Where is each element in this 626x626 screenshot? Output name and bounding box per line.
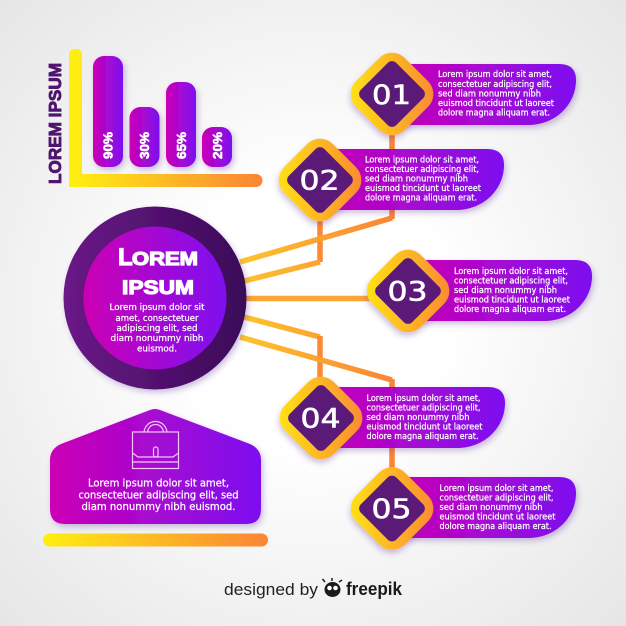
text 01: dolore magna aliquam erat.	[438, 108, 550, 118]
text 04: Lorem ipsum dolor sit amet,	[366, 394, 480, 404]
text 03: dolore magna aliquam erat.	[454, 305, 566, 315]
text 01: consectetuer adipiscing elit,	[438, 80, 552, 90]
text 05: sed diam nonummy nibh	[440, 503, 542, 513]
text 03	[454, 267, 571, 315]
bar 90%: 90%	[100, 132, 116, 159]
number 01: 01	[372, 80, 411, 111]
circle heading	[118, 244, 198, 299]
house text	[78, 478, 238, 513]
text 02: dolore magna aliquam erat.	[365, 194, 477, 204]
bar 30%	[130, 107, 160, 167]
banner 02	[319, 149, 504, 210]
house panel	[50, 409, 261, 524]
number 04: 04	[300, 404, 340, 434]
house text: Lorem ipsum dolor sit amet,	[88, 478, 229, 490]
text 05: consectetuer adipiscing elit,	[440, 494, 554, 504]
bar 90%	[93, 56, 123, 167]
text 04: dolore magna aliquam erat.	[366, 432, 478, 442]
banner 05	[391, 477, 576, 538]
text 04: sed diam nonummy nibh	[366, 413, 470, 423]
text 02: Lorem ipsum dolor sit amet,	[365, 156, 479, 166]
text 05: dolore magna aliquam erat.	[440, 522, 552, 532]
diamond 01	[343, 45, 441, 143]
text 03: sed diam nonummy nibh	[454, 286, 557, 296]
connector lines	[240, 130, 392, 475]
text 05: euismod tincidunt ut laoreet	[440, 512, 556, 522]
freepik: freepik	[346, 579, 403, 599]
circle body text: Lorem ipsum dolor sit	[110, 303, 205, 313]
text 02	[365, 156, 482, 204]
footer credit	[224, 578, 403, 599]
item 04	[272, 369, 505, 467]
item 01	[343, 45, 576, 143]
house shape	[50, 409, 261, 524]
bar 65%: 65%	[174, 132, 189, 159]
text 02: euismod tincidunt ut laoreet	[365, 184, 482, 194]
chart title: LOREM IPSUM	[45, 63, 65, 184]
text 01: sed diam nonummy nibh	[438, 90, 541, 100]
diamond 05	[343, 460, 441, 557]
text 02: consectetuer adipiscing elit,	[365, 165, 479, 175]
bar 65%	[166, 82, 196, 167]
banner 01	[391, 64, 576, 125]
text 03: euismod tincidunt ut laoreet	[454, 296, 571, 306]
bar chart	[45, 49, 262, 187]
circle heading: L	[118, 244, 133, 271]
text 03: Lorem ipsum dolor sit amet,	[454, 267, 568, 277]
diamond 02	[271, 131, 369, 229]
bar 20%	[202, 127, 232, 167]
text 05: Lorem ipsum dolor sit amet,	[440, 484, 554, 494]
text 01: Lorem ipsum dolor sit amet,	[438, 70, 552, 80]
icon: briefcase	[132, 422, 178, 468]
number 03: 03	[388, 276, 428, 308]
text 04	[366, 394, 483, 442]
text 05	[440, 484, 556, 532]
banner 04	[320, 387, 505, 448]
circle body text	[110, 303, 205, 354]
bar 20%: 20%	[210, 132, 225, 159]
circle inner	[84, 226, 226, 370]
text 01	[438, 70, 555, 118]
chart axes	[69, 49, 262, 187]
icon: freepik logo	[322, 578, 342, 597]
house text: consectetuer adipiscing elit, sed	[78, 490, 238, 502]
circle ring	[64, 206, 246, 390]
text 04: consectetuer adipiscing elit,	[366, 404, 480, 414]
house text: diam nonummy nibh euismod.	[82, 501, 236, 513]
circle body text: diam nonummy nibh	[110, 334, 204, 344]
item 02	[271, 131, 504, 229]
text 02: sed diam nonummy nibh	[365, 174, 468, 184]
circle heading: OREM	[132, 248, 198, 269]
item 03	[359, 242, 592, 340]
diamond 04	[272, 369, 370, 467]
circle heading: IPSUM	[122, 277, 194, 299]
item 05	[343, 460, 576, 557]
circle body text: amet, consectetuer	[116, 314, 199, 324]
text 04: euismod tincidunt ut laoreet	[366, 422, 483, 432]
circle body text: euismod.	[137, 344, 177, 354]
number 02: 02	[300, 166, 340, 196]
text 03: consectetuer adipiscing elit,	[454, 276, 568, 286]
diamond 03	[359, 242, 457, 340]
designed by: designed by	[224, 580, 319, 599]
text 01: euismod tincidunt ut laoreet	[438, 99, 555, 109]
base bar	[43, 534, 268, 546]
circle body text: adipiscing elit, sed	[116, 324, 198, 334]
central circle	[64, 206, 246, 390]
number 05: 05	[372, 494, 412, 525]
bar 30%: 30%	[137, 132, 152, 159]
banner 03	[407, 260, 592, 321]
